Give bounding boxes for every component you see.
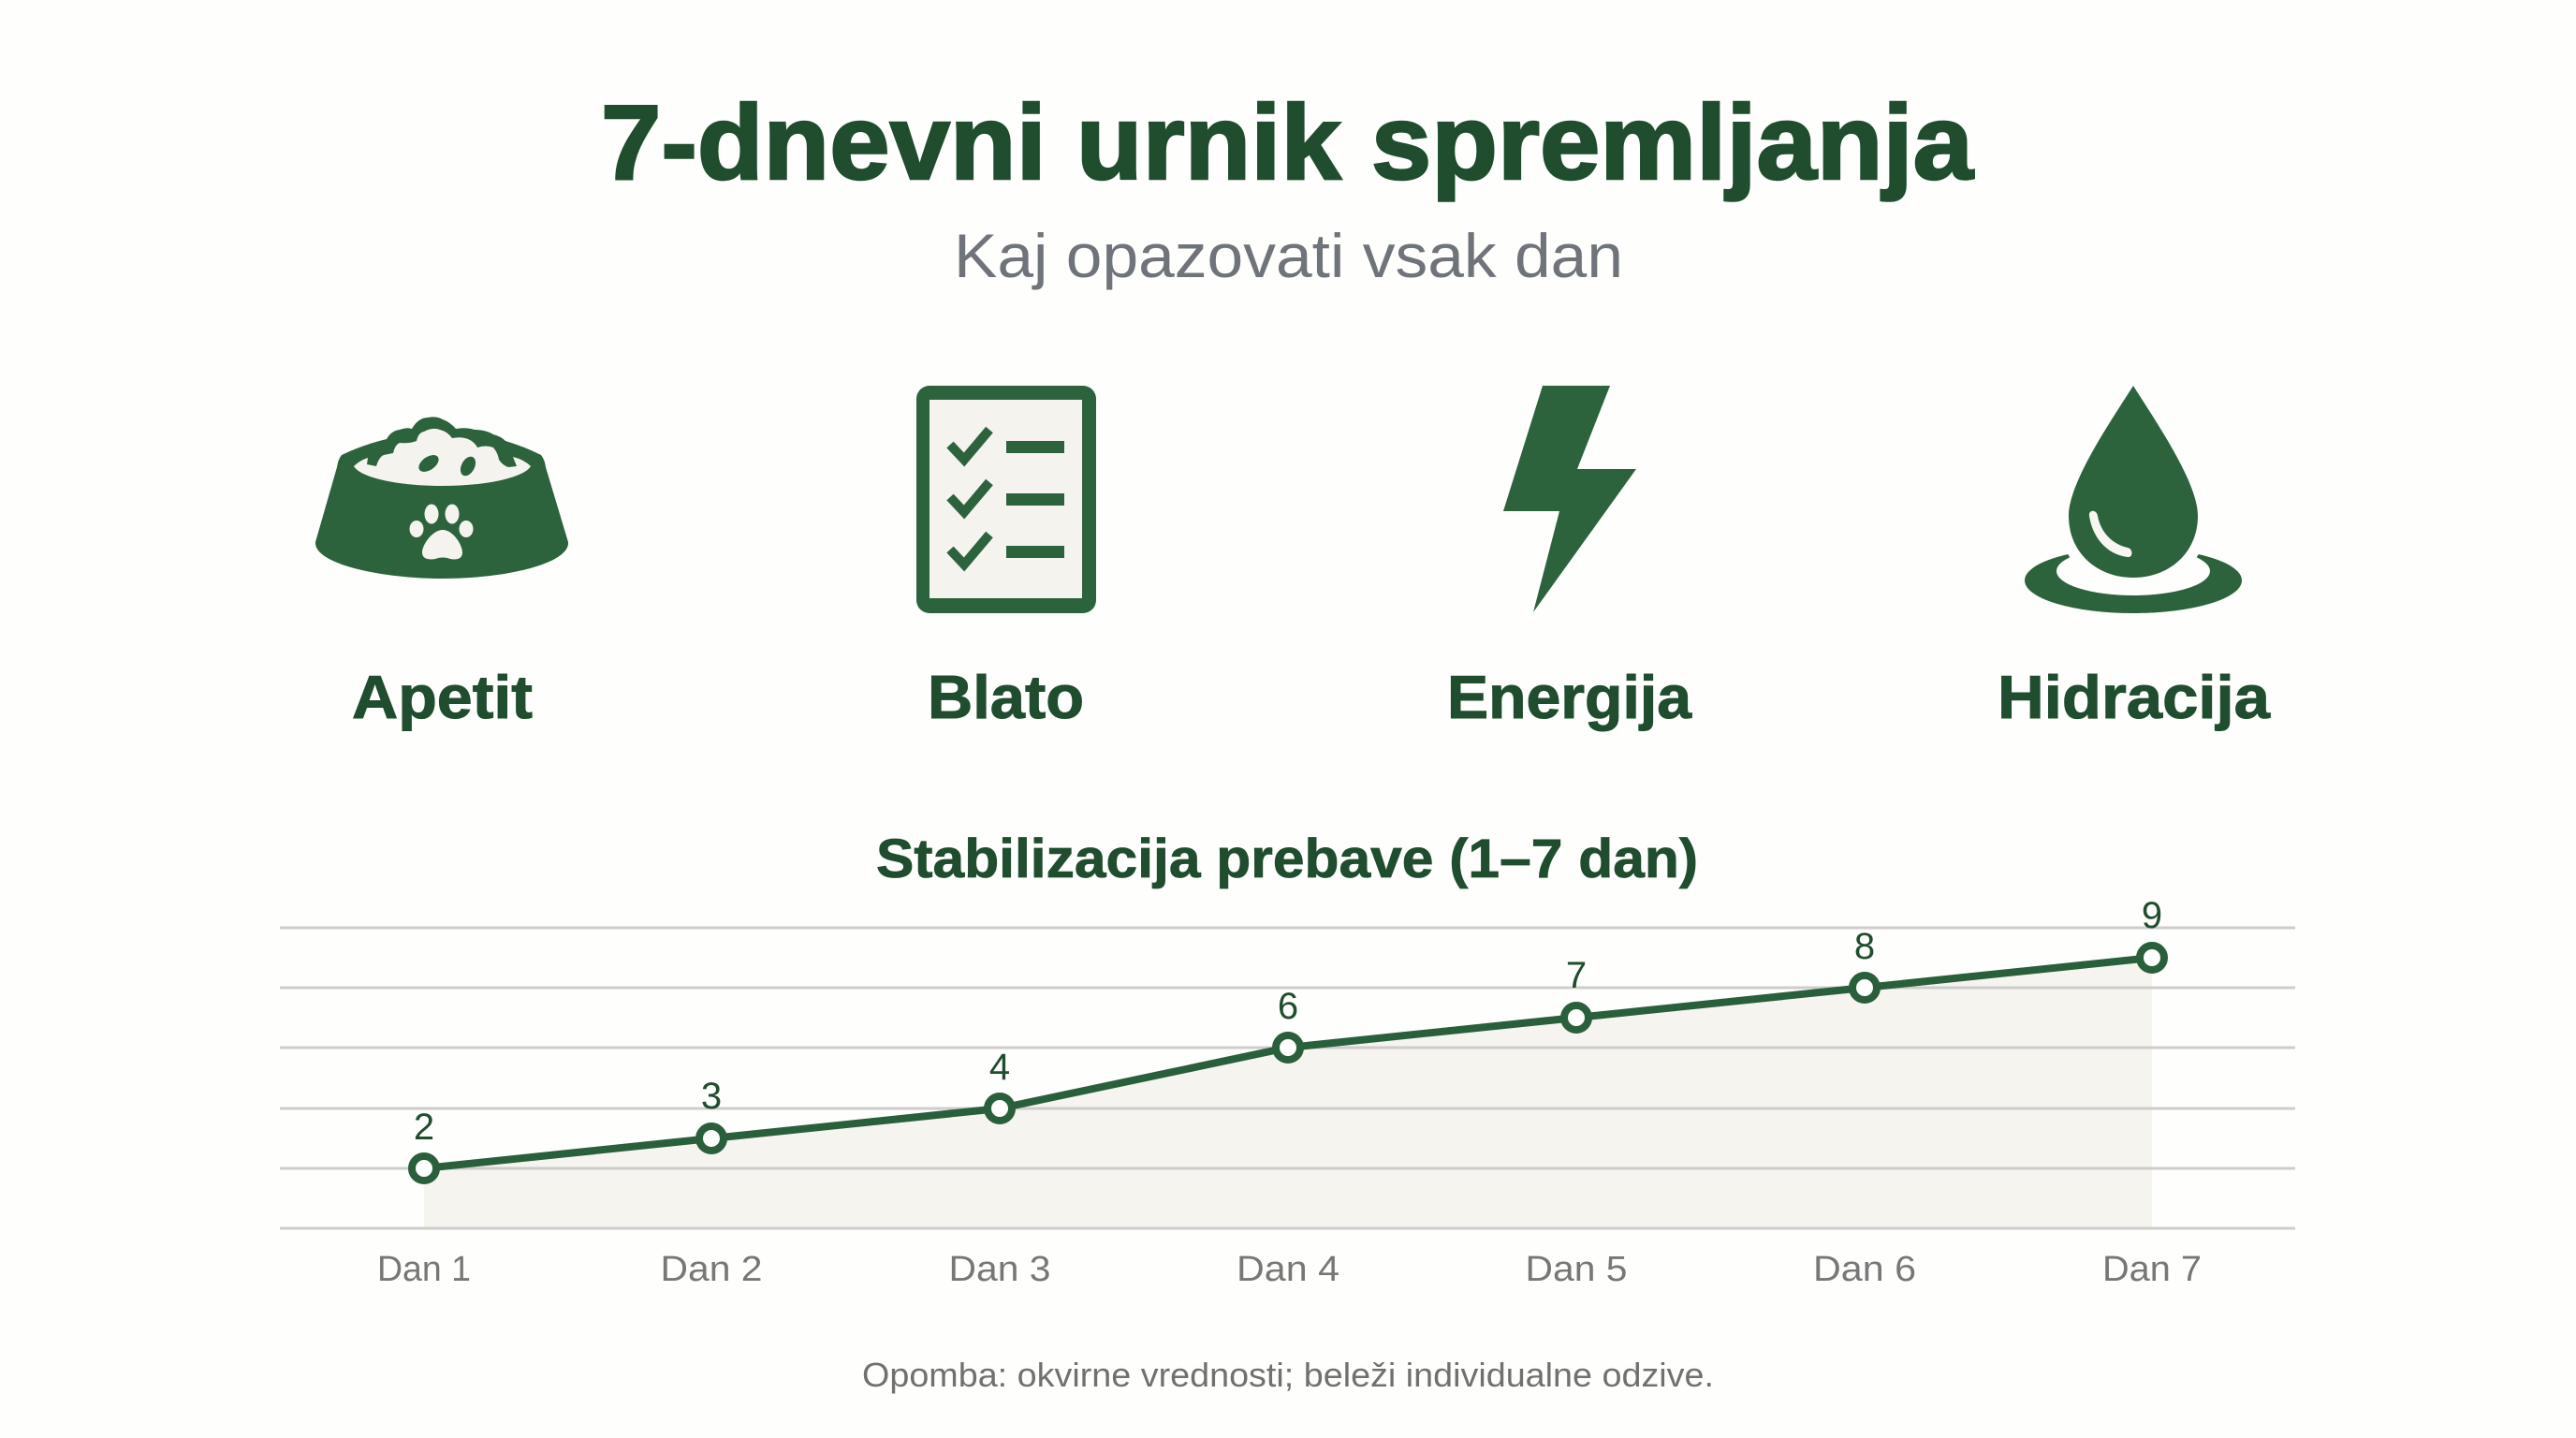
x-axis day labels: Dan 6: [1813, 1250, 1916, 1289]
x-axis day labels: Dan 2: [661, 1250, 762, 1289]
data value labels: 2: [414, 1107, 434, 1148]
icon detail: paw print: [410, 504, 474, 559]
label: Energija: Energija: [1447, 663, 1692, 731]
data value labels: 8: [1854, 926, 1875, 967]
icon: dog food bowl: [315, 417, 568, 579]
data value labels: 9: [2142, 895, 2162, 936]
icon: water drop with ripple: [2025, 386, 2242, 613]
data line: [424, 958, 2152, 1168]
label: Hidracija: Hidracija: [1998, 663, 2271, 731]
subtitle: Kaj opazovati vsak dan: [954, 221, 1623, 290]
x-axis day labels: Dan 3: [949, 1250, 1050, 1289]
label: Blato: Blato: [928, 663, 1084, 731]
data value labels: 7: [1566, 955, 1587, 996]
x-axis day labels: Dan 5: [1526, 1250, 1627, 1289]
title: 7-dnevni urnik spremljanja: [601, 83, 1974, 201]
x-axis day labels: Dan 1: [377, 1250, 471, 1289]
data value labels: 6: [1278, 986, 1298, 1027]
chart area fill: [424, 958, 2152, 1228]
icon: lightning bolt: [1503, 386, 1636, 612]
line chart: digestive stabilisation: [280, 895, 2295, 1289]
chart heading: Stabilizacija prebave (1–7 dan): [876, 829, 1698, 889]
x-axis day labels: [377, 1250, 2202, 1289]
label: Apetit: Apetit: [352, 663, 533, 731]
footnote: Opomba: okvirne vrednosti; beleži individualne odzive.: [862, 1356, 1714, 1394]
data value labels: 4: [989, 1047, 1010, 1088]
x-axis day labels: Dan 4: [1237, 1250, 1339, 1289]
icon: checklist: [916, 386, 1096, 613]
data value labels: [414, 895, 2162, 1148]
x-axis day labels: Dan 7: [2102, 1250, 2202, 1289]
data point markers: [412, 946, 2164, 1181]
data value labels: 3: [701, 1076, 722, 1117]
